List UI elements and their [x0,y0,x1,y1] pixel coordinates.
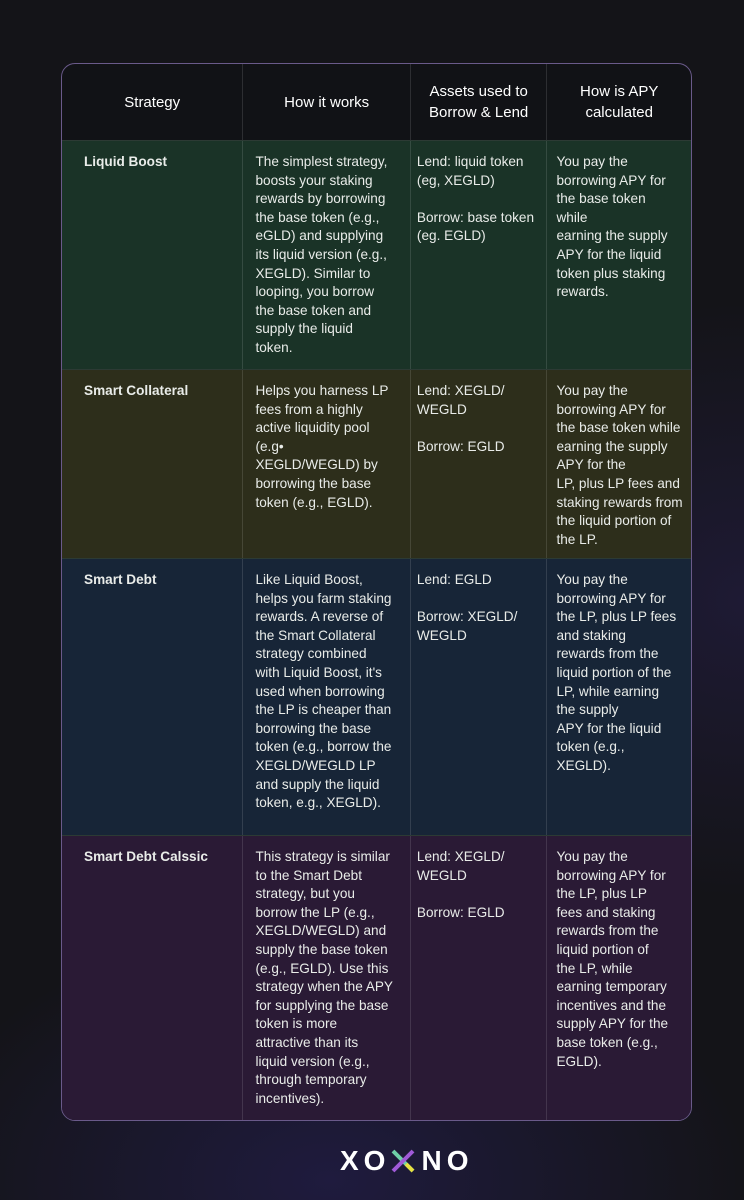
row: Smart Debt: XEGLD/WEGLD LP [255,758,376,773]
row: Smart Debt Calssic: (e.g., EGLD). Use this [255,961,388,976]
row: Smart Debt: with Liquid Boost, it's [255,665,382,680]
row: Smart Collateral [62,369,691,558]
header row: How is APY [580,83,658,100]
row: Smart Collateral: WEGLD [417,402,467,417]
header row [124,64,658,140]
row: Smart Collateral: borrowing the base [255,476,371,491]
row: Liquid Boost: token. [255,340,292,355]
row: Smart Collateral: APY for the [556,457,626,472]
row: Smart Debt Calssic: incentives). [255,1091,324,1106]
row: Smart Debt [62,558,691,835]
row: Smart Debt: helps you farm staking [255,591,391,606]
row: Smart Debt: borrowing APY for [556,591,666,606]
row: Smart Debt Calssic: token is more [255,1016,337,1031]
row: Smart Collateral: LP, plus LP fees and [556,476,680,491]
row: Smart Debt: liquid portion of the [556,665,671,680]
row: Smart Debt Calssic: the LP, plus LP [556,886,647,901]
row: Smart Debt: and staking [556,628,626,643]
row: Liquid Boost: boosts your staking [255,173,373,188]
row: Smart Debt: token, e.g., XEGLD). [255,795,381,810]
row: Liquid Boost: supply the liquid [255,321,353,336]
row: Smart Debt: token (e.g., borrow the [255,739,391,754]
row: Smart Debt Calssic: EGLD). [556,1054,602,1069]
row: Liquid Boost: while [556,210,587,225]
row: Smart Debt Calssic: rewards from the [556,923,658,938]
table [61,63,692,1121]
row: Smart Collateral: the LP. [556,532,598,547]
row: Smart Debt Calssic: WEGLD [417,868,467,883]
header row: Strategy [124,94,180,110]
row: Smart Debt Calssic: Lend: XEGLD/ [417,849,505,864]
row: Smart Debt Calssic: fees and staking [556,905,655,920]
row: Liquid Boost: APY for the liquid [556,247,661,262]
row: Smart Debt Calssic: earning temporary [556,979,667,994]
row: Smart Debt: rewards. A reverse of [255,609,383,624]
row: Liquid Boost: the base token [556,191,646,206]
row: Smart Debt: used when borrowing [255,684,385,699]
row: Smart Debt Calssic: Borrow: EGLD [417,905,505,920]
row: Smart Debt Calssic: borrowing APY for [556,868,666,883]
row: Liquid Boost: (eg, XEGLD) [417,173,495,188]
row: Smart Debt Calssic: through temporary [255,1072,367,1087]
row: Smart Debt Calssic: attractive than its [255,1035,358,1050]
logo: XO NO [340,1145,473,1176]
row: Liquid Boost: You pay the [556,154,628,169]
row: Smart Collateral: active liquidity pool [255,420,370,435]
row: Smart Debt: token (e.g., [556,739,624,754]
row: Smart Debt: Like Liquid Boost, [255,572,363,587]
row: Smart Debt Calssic [62,835,691,1122]
row: Smart Debt: XEGLD). [556,758,611,773]
row: Smart Debt: borrowing the base [255,721,371,736]
row: Smart Collateral: token (e.g., EGLD). [255,495,373,510]
row: Smart Collateral: Lend: XEGLD/ [417,383,505,398]
header row: How it works [284,94,369,110]
row: Smart Debt Calssic: strategy, but you [255,886,355,901]
row: Liquid Boost: XEGLD). Similar to [255,266,370,281]
row: Smart Debt Calssic: XEGLD/WEGLD) and [255,923,386,938]
row: Smart Collateral: borrowing APY for [556,402,666,417]
row: Smart Collateral: Borrow: EGLD [417,439,505,454]
row: Liquid Boost: Borrow: base token [417,210,534,225]
row: Smart Debt: You pay the [556,572,628,587]
row: Liquid Boost: eGLD) and supplying [255,228,383,243]
row: Smart Debt: WEGLD [417,628,467,643]
row: Liquid Boost: the base token (e.g., [255,210,379,225]
row: Liquid Boost: looping, you borrow [255,284,374,299]
row: Smart Collateral: Helps you harness LP [255,383,388,398]
row: Smart Debt Calssic: to the Smart Debt [255,868,362,883]
row: Smart Collateral: the base token while [556,420,680,435]
row: Smart Debt: and supply the liquid [255,777,379,792]
row: Smart Collateral: the liquid portion of [556,513,671,528]
row: Smart Debt: the LP is cheaper than [255,702,391,717]
row: Smart Debt: the supply [556,702,618,717]
row: Liquid Boost: (eg. EGLD) [417,228,486,243]
row: Liquid Boost [62,140,691,369]
row: Smart Collateral: earning the supply [556,439,668,454]
row: Smart Collateral: XEGLD/WEGLD) by [255,457,378,472]
row: Smart Debt Calssic: Smart Debt Calssic [84,849,208,864]
row: Smart Debt Calssic: strategy when the APY [255,979,393,994]
row: Smart Debt Calssic: liquid version (e.g., [255,1054,370,1069]
row: Liquid Boost: The simplest strategy, [255,154,387,169]
row: Smart Debt Calssic: borrow the LP (e.g., [255,905,375,920]
row: Smart Debt Calssic: liquid portion of [556,942,649,957]
row: Liquid Boost: rewards. [556,284,609,299]
row: Smart Debt Calssic: incentives and the [556,998,666,1013]
row: Smart Debt Calssic: base token (e.g., [556,1035,658,1050]
row: Smart Debt: the LP, plus LP fees [556,609,676,624]
row: Smart Collateral: Smart Collateral [84,383,188,398]
header row: Borrow & Lend [429,104,528,121]
row: Liquid Boost: Liquid Boost [84,154,167,169]
row: Liquid Boost: the base token and [255,303,371,318]
row: Smart Debt Calssic: supply the base token [255,942,388,957]
row: Smart Debt: rewards from the [556,646,658,661]
row: Smart Debt: Smart Debt [84,572,157,587]
row: Liquid Boost: token plus staking [556,266,665,281]
row: Smart Debt Calssic: the LP, while [556,961,633,976]
row: Smart Debt: Lend: EGLD [417,572,492,587]
header row: Assets used to [429,83,528,100]
row: Liquid Boost: earning the supply [556,228,668,243]
row: Smart Debt Calssic: You pay the [556,849,628,864]
row: Smart Debt Calssic: for supplying the base [255,998,388,1013]
row: Smart Debt: strategy combined [255,646,367,661]
row: Liquid Boost: rewards by borrowing [255,191,385,206]
row: Smart Debt: Borrow: XEGLD/ [417,609,517,624]
header row: calculated [585,104,653,121]
row: Smart Debt Calssic: supply APY for the [556,1016,668,1031]
row: Smart Collateral: (e.g• [255,439,284,454]
row: Smart Collateral: fees from a highly [255,402,363,417]
row: Smart Collateral: You pay the [556,383,628,398]
row: Smart Collateral: staking rewards from [556,495,683,510]
row: Liquid Boost: its liquid version (e.g., [255,247,387,262]
row: Smart Debt: LP, while earning [556,684,659,699]
row: Smart Debt: APY for the liquid [556,721,661,736]
row: Smart Debt Calssic: This strategy is similar [255,849,390,864]
row: Smart Debt: the Smart Collateral [255,628,376,643]
row: Liquid Boost: borrowing APY for [556,173,666,188]
row: Liquid Boost: Lend: liquid token [417,154,524,169]
